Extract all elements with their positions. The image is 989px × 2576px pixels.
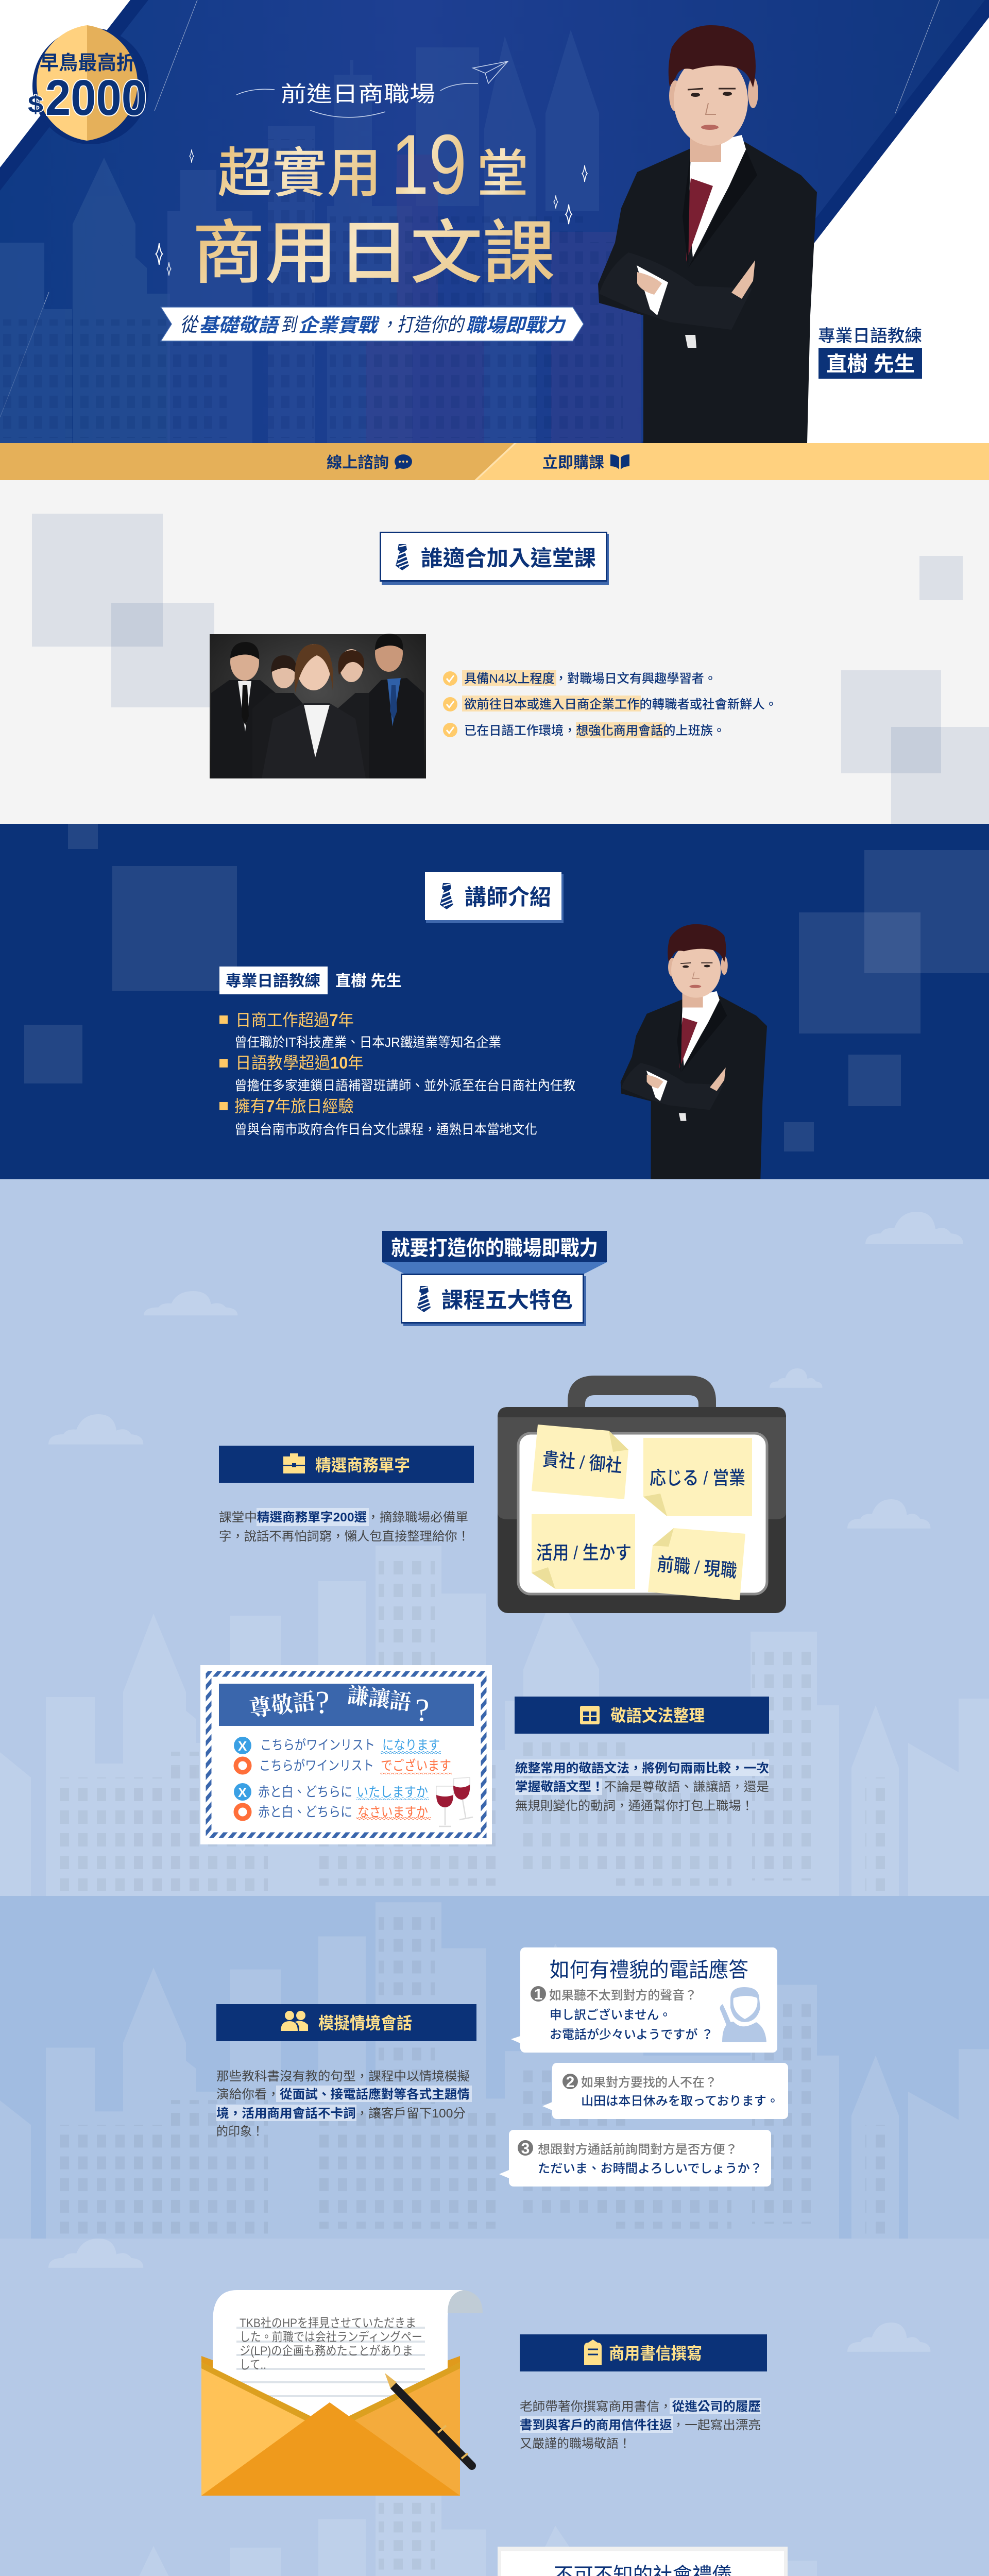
description: 無規則變化的動詞，通通幫你打包上職場！ <box>515 1799 754 1813</box>
description: 境，活用商用會話不卡詞 ，讓客戶留下100分 <box>216 2107 466 2121</box>
speech bubble 3 <box>499 2130 771 2187</box>
heading: five features <box>382 1231 607 1326</box>
subtitle: 前進日商職場 <box>281 82 435 106</box>
credentials list <box>219 1011 575 1137</box>
hero background shape <box>0 0 989 443</box>
description: 又嚴謹的職場敬語！ <box>520 2437 631 2451</box>
note 1 <box>532 1425 628 1499</box>
instructor name: 直樹 先生 <box>335 973 402 990</box>
icon: fountain pen <box>385 2373 472 2466</box>
tagline ribbon: 職場即戰力 <box>466 315 566 336</box>
description <box>520 2398 761 2451</box>
speech bubble 3: ただいま、お時間よろしいでしょうか？ <box>538 2162 762 2176</box>
speech bubble 1: お電話が少々いようですが ？ <box>550 2028 713 2042</box>
description <box>515 1759 769 1813</box>
example row 4: 赤と白、どちらに <box>258 1804 352 1820</box>
title bar: 精選商務單字 <box>315 1456 410 1475</box>
illustration: envelope with letter: して.. <box>240 2358 266 2372</box>
button: buy now: 立即購課 <box>542 454 604 471</box>
credential 1 <box>219 1011 501 1050</box>
call-to-action bar <box>0 443 989 480</box>
checklist <box>443 670 777 738</box>
photo: business team <box>210 634 426 778</box>
title bar: 商用書信撰寫 <box>609 2344 702 2363</box>
tagline ribbon: 到 <box>281 314 298 335</box>
example row 3: 赤と白、どちらに <box>258 1784 352 1800</box>
speech bubble 2 <box>542 2063 788 2119</box>
speech bubble 1: 如何有禮貌的電話應答 <box>550 1959 748 1981</box>
note 2: 応じる / 営業 <box>650 1467 745 1488</box>
example row 2: でございます <box>381 1758 451 1773</box>
credential 2: 日語教學超過10年 <box>235 1054 364 1072</box>
illustration: envelope with letter: ジ(LP)の企画も務めたことがありま <box>240 2344 413 2358</box>
item 2: 欲前往日本或進入日商企業工作的轉職者或社會新鮮人。 <box>464 698 777 711</box>
button: online consult: 線上諮詢 <box>327 454 389 471</box>
title line 1: 超實用 <box>217 144 382 204</box>
title bar <box>515 1697 769 1734</box>
illustration: honorific card: ? <box>415 1693 430 1728</box>
item 1: 具備N4以上程度，對職場日文有興趣學習者。 <box>464 672 717 686</box>
illustration: honorific card: 尊敬語 <box>248 1689 316 1722</box>
description: 掌握敬語文型！不論是尊敬語、謙讓語，還是 <box>515 1780 769 1794</box>
icon: paper plane <box>473 61 508 83</box>
credential 3 <box>219 1097 537 1137</box>
example row 2 <box>236 1758 452 1774</box>
example row 2: こちらがワインリスト <box>259 1758 374 1773</box>
speech bubble 3: 3 <box>521 2140 530 2157</box>
title line 1: 19 <box>391 117 467 212</box>
panel: five features background <box>0 1179 989 2576</box>
illustration: honorific card: 謙讓語 <box>346 1683 413 1715</box>
heading: five features: 課程五大特色 <box>441 1288 573 1312</box>
example row 3 <box>234 1783 429 1801</box>
tagline ribbon: 基礎敬語 <box>199 315 281 336</box>
description: 演給你看，從面試、接電話應對等各式主題情 <box>216 2087 470 2102</box>
title line 1: 堂 <box>477 145 528 203</box>
title bar <box>520 2334 767 2371</box>
early bird badge: $ <box>28 91 43 117</box>
description: 字，說話不再怕詞窮，懶人包直接整理給你！ <box>219 1530 470 1544</box>
illustration: envelope with letter <box>201 2290 483 2496</box>
speech bubble 1: 1 <box>534 1986 542 2003</box>
example row 1: X <box>238 1738 247 1754</box>
instructor photo <box>598 25 817 443</box>
item 3: 已在日語工作環境，想強化商用會話的上班族。 <box>464 724 725 738</box>
instructor label <box>818 326 922 379</box>
credential 2: 曾擔任多家連鎖日語補習班講師、並外派至在台日商社內任教 <box>234 1078 575 1093</box>
feature 3: role-play conversation <box>216 1947 788 2187</box>
speech bubble 3: 想跟對方通話前詢問對方是否方便？ <box>538 2143 738 2157</box>
instructor name: 專業日語教練 <box>226 973 320 990</box>
credential 1: 曾任職於IT科技產業、日本JR鐵道業等知名企業 <box>234 1035 501 1050</box>
note 3 <box>532 1514 635 1589</box>
example row 1: こちらがワインリスト <box>260 1737 375 1753</box>
instructor photo <box>621 924 767 1179</box>
early bird badge <box>28 25 149 144</box>
title bar <box>216 2004 476 2041</box>
speech bubble 1: 如果聽不太到對方的聲音？ <box>549 1989 697 2003</box>
tagline ribbon <box>161 307 584 341</box>
early bird badge: 早鳥最高折 <box>40 53 135 74</box>
speech bubble 2: 2 <box>566 2074 574 2091</box>
description: 統整常用的敬語文法，將例句兩兩比較，一次 <box>515 1761 769 1775</box>
heading: five features: 就要打造你的職場即戰力 <box>391 1237 598 1260</box>
description: 的印象！ <box>216 2125 264 2139</box>
description <box>216 2070 472 2139</box>
feature 2: honorific grammar <box>200 1665 769 1844</box>
instructor label: 專業日語教練 <box>818 326 922 345</box>
heading: 誰適合加入這堂課 <box>421 546 596 570</box>
note 4: 前職 / 現職 <box>656 1553 738 1581</box>
credential 3: 曾與台南市政府合作日台文化課程，通熟日本當地文化 <box>234 1122 537 1137</box>
title bar: 模擬情境會話 <box>318 2014 412 2032</box>
description: 老師帶著你撰寫商用書信， 從進公司的履歷 <box>520 2400 761 2414</box>
description: 書到與客戶的商用信件往返 ，一起寫出漂亮 <box>520 2418 761 2432</box>
illustration: briefcase with notes <box>498 1376 786 1613</box>
example row 4 <box>236 1804 431 1820</box>
panel: who should join <box>0 480 989 824</box>
description: 那些教科書沒有教的句型，課程中以情境模擬 <box>216 2070 470 2083</box>
note 1: 貴社 / 御社 <box>541 1448 623 1476</box>
description <box>219 1508 470 1544</box>
example row 1 <box>234 1737 441 1754</box>
speech bubble 2: 如果對方要找的人不在？ <box>581 2076 717 2090</box>
description: 課堂中精選商務單字200選，摘錄職場必備單 <box>219 1511 468 1524</box>
illustration: envelope with letter: した。前職では会社ランディングペー <box>240 2330 422 2344</box>
feature 1: vocabulary <box>219 1376 786 1613</box>
speech bubble 1 <box>511 1947 777 2053</box>
title bar: 敬語文法整理 <box>610 1706 705 1725</box>
title bar <box>219 1446 474 1483</box>
example row 3: X <box>238 1785 247 1800</box>
note 3: 活用 / 生かす <box>536 1542 632 1563</box>
icon: person on phone <box>720 1987 766 2042</box>
sparkles <box>156 149 587 276</box>
instructor name <box>219 967 402 994</box>
example row 3: いたしますか <box>356 1784 428 1800</box>
illustration: envelope with letter: TKB社のHPを拝見させていただきま <box>240 2316 416 2330</box>
feature 5: workplace culture <box>218 2547 788 2576</box>
speech bubble 1: 申し訳ございません。 <box>550 2008 671 2022</box>
credential 3: 擁有7年旅日經驗 <box>234 1097 354 1115</box>
panel: instructor intro <box>0 824 989 1179</box>
heading <box>425 872 564 923</box>
note 2 <box>643 1438 752 1516</box>
panel: hero banner <box>0 0 989 443</box>
heading <box>380 533 609 585</box>
tagline ribbon: 企業實戰 <box>298 315 380 336</box>
panel: social manners <box>498 2547 788 2576</box>
subtitle <box>236 82 478 117</box>
example row 4: なさいますか <box>357 1804 428 1820</box>
icon: wine glasses <box>436 1777 473 1826</box>
example row 1: になります <box>382 1737 440 1753</box>
tagline ribbon: 從 <box>180 314 199 335</box>
heading: 講師介紹 <box>465 885 551 909</box>
instructor label: 直樹 先生 <box>826 353 915 376</box>
title line 2: 商用日文課 <box>192 214 555 292</box>
speech bubble 2: 山田は本日休みを取っております。 <box>581 2094 779 2108</box>
note 4 <box>648 1528 745 1600</box>
feature 4: business letters <box>201 2290 767 2496</box>
illustration: honorific card: ? <box>315 1685 330 1720</box>
illustration: honorific card <box>200 1665 492 1844</box>
tagline ribbon: ，打造你的 <box>380 314 466 335</box>
early bird badge: 2000 <box>45 70 147 126</box>
title line 1 <box>217 117 528 212</box>
credential 1: 日商工作超過7年 <box>235 1011 354 1029</box>
credential 2 <box>219 1054 575 1093</box>
